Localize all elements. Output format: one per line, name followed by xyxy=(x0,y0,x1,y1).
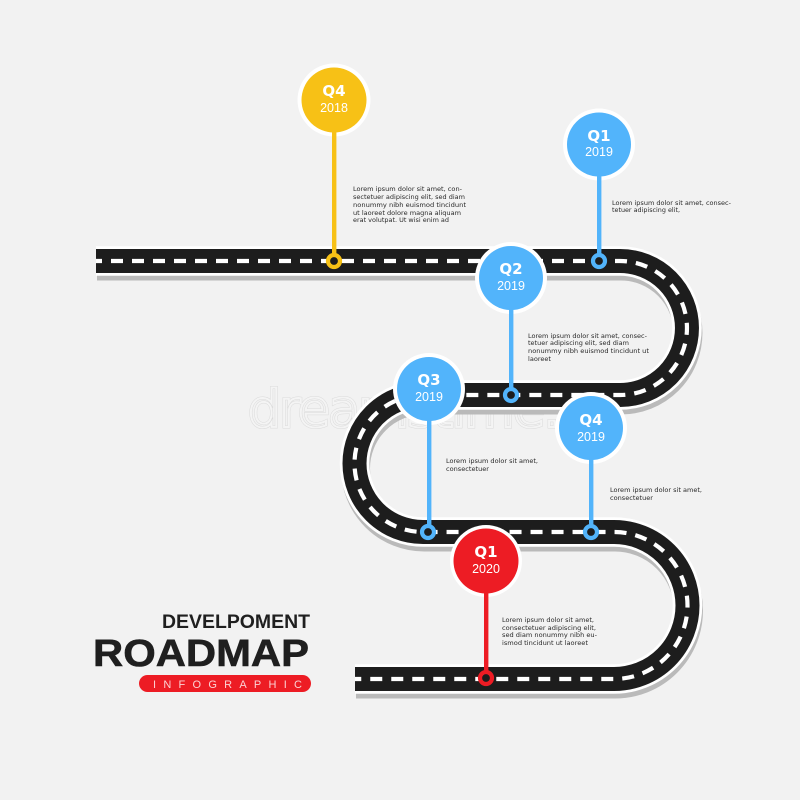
text block: Q1 2020: Lorem ipsum dolor sit amet, xyxy=(502,617,594,624)
text block: Q4 2018: ut laoreet dolore magna aliquam xyxy=(353,210,461,217)
milestone: Q1 2019: 2019 xyxy=(585,145,613,159)
text block: Q4 2018: sectetuer adipiscing elit, sed diam xyxy=(353,194,465,201)
text block: Q1 2020: consectetuer adipiscing elit, xyxy=(502,625,596,632)
text block: Q1 2019 xyxy=(612,200,731,214)
text block: Q1 2020 xyxy=(502,617,597,647)
watermark: dreamstime. xyxy=(248,380,560,440)
road xyxy=(96,261,688,684)
milestone: Q4 2018: Q4 xyxy=(322,82,346,100)
text block: Q3 2019 xyxy=(446,458,538,473)
text block: Q1 2019: Lorem ipsum dolor sit amet, consec- xyxy=(612,200,731,207)
text block: Q4 2018 xyxy=(353,186,467,224)
text block: Q3 2019: consectetuer xyxy=(446,466,489,473)
title: ROADMAP xyxy=(93,633,309,675)
text block: Q1 2020: ismod tincidunt ut laoreet xyxy=(502,640,589,647)
text block: Q2 2019: nonummy nibh euismod tincidunt ut xyxy=(528,348,650,355)
milestone: Q4 2018 xyxy=(298,64,370,267)
text block: Q2 2019: laoreet xyxy=(528,356,552,363)
text block: Q2 2019: tetuer adipiscing elit, sed diam xyxy=(528,340,629,347)
text block: Q4 2018: erat volutpat. Ut wisi enim ad xyxy=(353,217,449,224)
milestone: Q1 2020 xyxy=(450,525,522,684)
text block: Q1 2019: tetuer adipiscing elit, xyxy=(612,207,680,214)
text block: Q4 2019 xyxy=(610,487,702,502)
text block: Q2 2019: Lorem ipsum dolor sit amet, consec- xyxy=(528,333,647,340)
text block: Q4 2018: nonummy nibh euismod tincidunt xyxy=(353,202,467,209)
milestone: Q2 2019: Q2 xyxy=(499,260,523,278)
milestone: Q4 2019 xyxy=(555,392,627,538)
milestone: Q1 2020: 2020 xyxy=(472,562,500,576)
milestone: Q1 2020: Q1 xyxy=(474,543,498,561)
milestone: Q3 2019: 2019 xyxy=(415,390,443,404)
milestone: Q3 2019: Q3 xyxy=(417,371,441,389)
text block: Q4 2019: Lorem ipsum dolor sit amet, xyxy=(610,487,702,494)
milestone: Q1 2019 xyxy=(563,108,635,267)
text block: Q1 2020: sed diam nonummy nibh eu- xyxy=(502,632,597,639)
milestone: Q3 2019 xyxy=(393,353,465,538)
text block: Q4 2019: consectetuer xyxy=(610,495,653,502)
milestone: Q1 2019: Q1 xyxy=(587,127,611,145)
milestone: Q4 2018: 2018 xyxy=(320,101,348,115)
title: DEVELPOMENT xyxy=(162,612,310,633)
subtitle pill xyxy=(139,675,311,692)
milestone: Q4 2019: 2019 xyxy=(577,430,605,444)
watermark: dreamstime. xyxy=(248,380,560,440)
milestone: Q2 2019 xyxy=(475,242,547,401)
title xyxy=(93,612,310,675)
subtitle pill: INFOGRAPHIC xyxy=(153,679,302,691)
text block: Q3 2019: Lorem ipsum dolor sit amet, xyxy=(446,458,538,465)
text block: Q2 2019 xyxy=(528,333,650,363)
text block: Q4 2018: Lorem ipsum dolor sit amet, con- xyxy=(353,186,462,193)
milestone: Q4 2019: Q4 xyxy=(579,411,603,429)
milestone: Q2 2019: 2019 xyxy=(497,279,525,293)
